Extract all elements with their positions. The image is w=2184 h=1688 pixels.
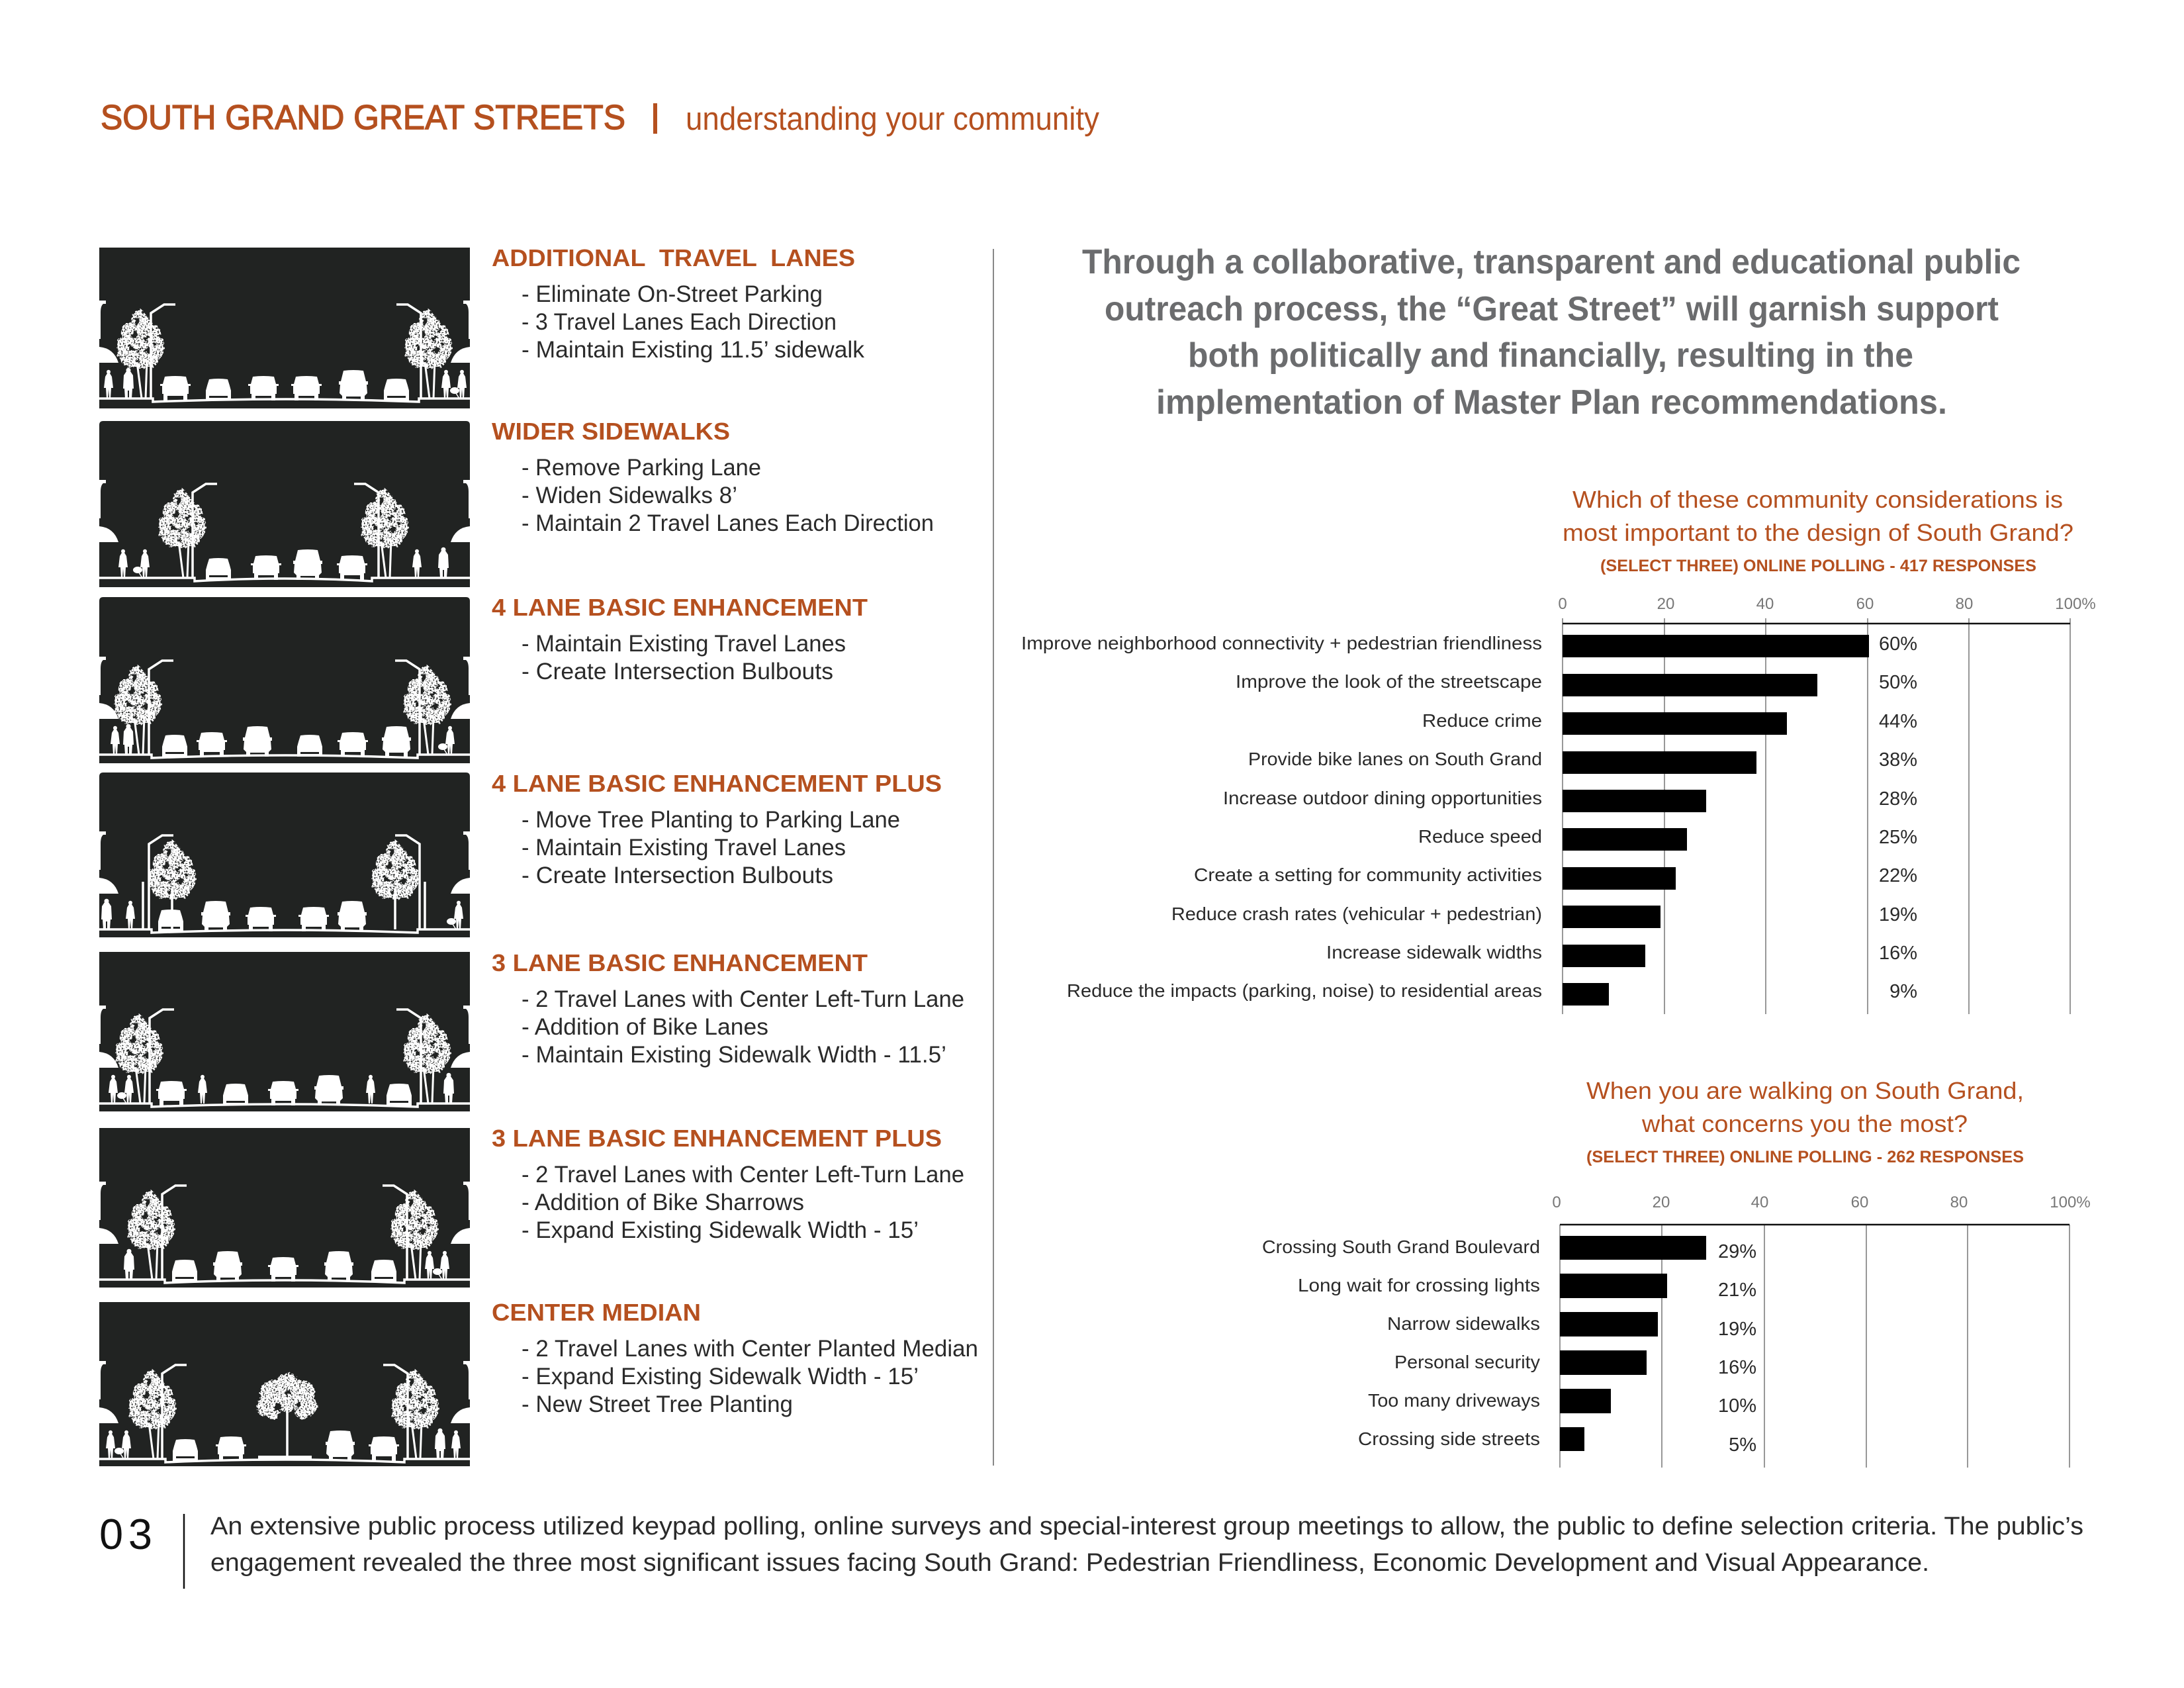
text block: 3 lane basic enhancement plus: 3 LANE BASIC ENHANCEMENT PLUS <box>492 1125 942 1152</box>
text block: 4 lane basic enhancement plus: 4 LANE BASIC ENHANCEMENT PLUS <box>492 770 942 797</box>
text block: 4 lane basic enhancement <box>492 594 868 684</box>
panel: center median section <box>99 1302 470 1466</box>
text block: 4 lane basic enhancement plus: - Create Intersection Bulbouts <box>522 863 833 888</box>
text block: 4 lane basic enhancement plus <box>492 770 942 888</box>
chart heading: walking concerns: what concerns you the most? <box>1641 1110 1968 1137</box>
row labels: Personal security <box>1394 1352 1540 1372</box>
trees and street lights <box>158 484 408 578</box>
text block: 4 lane basic enhancement: 4 LANE BASIC ENHANCEMENT <box>492 594 868 621</box>
cars <box>160 370 409 400</box>
footer text <box>210 1513 2083 1577</box>
row labels: Crossing side streets <box>1358 1429 1540 1449</box>
text block: additional travel lanes: - Maintain Existing 11.5’ sidewalk <box>522 337 864 363</box>
road and sidewalks <box>99 1103 470 1107</box>
chart heading: walking concerns: (SELECT THREE) ONLINE POLLING - 262 RESPONSES <box>1586 1148 2024 1166</box>
pedestrians <box>106 1429 461 1459</box>
chart heading: design considerations: most important to the design of South Grand? <box>1563 519 2073 546</box>
bar chart: walking concerns <box>1262 1194 2091 1468</box>
pedestrians <box>111 724 455 755</box>
footer text: An extensive public process utilized keypad polling, online surveys and special-interest group meetings to allow, the public to define selection criteria. The public’s <box>210 1513 2083 1540</box>
row labels: Improve neighborhood connectivity + pedestrian friendliness <box>1021 633 1542 653</box>
trees and street lights <box>143 835 425 929</box>
bars <box>1560 1236 1706 1451</box>
text block: 3 lane basic enhancement: 3 LANE BASIC ENHANCEMENT <box>492 949 868 976</box>
panel: additional travel lanes section <box>99 248 470 408</box>
row labels: Reduce the impacts (parking, noise) to residential areas <box>1067 980 1542 1001</box>
value labels: 22% <box>1879 865 1917 886</box>
text block: 3 lane basic enhancement: - Addition of Bike Lanes <box>522 1014 768 1040</box>
trees and street lights <box>116 305 452 399</box>
pedestrians <box>118 547 449 578</box>
bar chart: design considerations <box>1021 595 2096 1014</box>
panel: 3 lane basic enhancement section <box>99 952 470 1111</box>
cars <box>206 549 367 580</box>
row labels: Long wait for crossing lights <box>1298 1275 1540 1295</box>
text block: 3 lane basic enhancement plus: - Addition of Bike Sharrows <box>522 1190 804 1215</box>
value labels <box>1879 633 1917 1002</box>
axis tick labels: 20 <box>1653 1194 1670 1211</box>
value labels: 9% <box>1889 981 1917 1002</box>
value labels: 10% <box>1718 1395 1756 1417</box>
panel: 4 lane basic enhancement section <box>99 597 470 763</box>
trees and street lights <box>114 661 451 755</box>
axis tick labels: 0 <box>1558 595 1567 613</box>
bicyclists <box>198 1075 375 1103</box>
axis tick labels <box>1558 595 2096 613</box>
cars <box>173 1430 399 1461</box>
text block: wider sidewalks: - Maintain 2 Travel Lanes Each Direction <box>522 510 934 536</box>
text block: additional travel lanes: - 3 Travel Lanes Each Direction <box>522 309 837 335</box>
chart heading: walking concerns <box>1586 1077 2024 1166</box>
row labels: Too many driveways <box>1368 1390 1540 1411</box>
value labels: 50% <box>1879 672 1917 693</box>
row labels: Narrow sidewalks <box>1387 1313 1540 1334</box>
statement text: Through a collaborative, transparent and educational public <box>1082 243 2021 281</box>
chart heading: design considerations <box>1563 486 2073 575</box>
row labels: Reduce crime <box>1422 710 1542 731</box>
text block: center median: - Expand Existing Sidewalk Width - 15’ <box>522 1364 919 1389</box>
trees and street lights <box>115 1009 451 1103</box>
axis tick labels: 40 <box>1751 1194 1768 1211</box>
text block: 3 lane basic enhancement: - 2 Travel Lanes with Center Left-Turn Lane <box>522 986 964 1012</box>
text block: center median: CENTER MEDIAN <box>492 1299 701 1326</box>
row labels: Increase sidewalk widths <box>1326 942 1542 962</box>
statement text: implementation of Master Plan recommendations. <box>1156 383 1947 422</box>
row labels <box>1262 1237 1540 1449</box>
road and sidewalks <box>99 578 470 581</box>
statement text: both politically and financially, resulting in the <box>1188 336 1913 375</box>
axis tick labels <box>1552 1194 2091 1211</box>
row labels: Crossing South Grand Boulevard <box>1262 1237 1540 1257</box>
axis tick labels: 60 <box>1856 595 1874 613</box>
statement text <box>1082 243 2021 422</box>
axis tick labels: 100% <box>2055 595 2096 613</box>
row labels: Reduce crash rates (vehicular + pedestrian) <box>1171 904 1542 924</box>
page number: 03 <box>99 1510 152 1558</box>
cars <box>172 1251 396 1282</box>
title <box>101 99 1099 137</box>
row labels: Create a setting for community activities <box>1194 865 1542 885</box>
value labels <box>1718 1241 1756 1456</box>
text block: 4 lane basic enhancement: - Maintain Existing Travel Lanes <box>522 631 846 657</box>
row labels: Provide bike lanes on South Grand <box>1248 749 1542 769</box>
statement text: outreach process, the “Great Street” will garnish support <box>1105 290 1999 328</box>
row labels <box>1021 633 1542 1001</box>
text block: 3 lane basic enhancement: - Maintain Existing Sidewalk Width - 11.5’ <box>522 1042 946 1068</box>
trees and street lights <box>127 1186 438 1280</box>
chart heading: design considerations: Which of these community considerations is <box>1572 486 2063 513</box>
text block: additional travel lanes: - Eliminate On-Street Parking <box>522 281 823 307</box>
planted median <box>258 1456 312 1460</box>
text block: 3 lane basic enhancement plus: - Expand Existing Sidewalk Width - 15’ <box>522 1217 919 1243</box>
value labels: 21% <box>1718 1280 1756 1301</box>
title: SOUTH GRAND GREAT STREETS <box>101 99 625 137</box>
text block: 3 lane basic enhancement <box>492 949 964 1068</box>
text block: 4 lane basic enhancement plus: - Move Tree Planting to Parking Lane <box>522 807 900 833</box>
text block: 4 lane basic enhancement: - Create Intersection Bulbouts <box>522 659 833 684</box>
panel: wider sidewalks section <box>99 421 470 587</box>
trees and street lights <box>128 1365 439 1459</box>
value labels: 19% <box>1879 904 1917 925</box>
text block: center median: - New Street Tree Planting <box>522 1391 793 1417</box>
text block: wider sidewalks: WIDER SIDEWALKS <box>492 418 730 445</box>
text block: wider sidewalks: - Remove Parking Lane <box>522 455 761 481</box>
value labels: 19% <box>1718 1319 1756 1340</box>
footer text: engagement revealed the three most significant issues facing South Grand: Pedestrian Friendliness, Economic Development and Visual Appearance. <box>210 1549 1929 1577</box>
axis tick labels: 80 <box>1956 595 1973 613</box>
text block: center median <box>492 1299 978 1417</box>
title: understanding your community <box>686 101 1099 137</box>
pedestrians <box>109 1073 454 1103</box>
text block: 3 lane basic enhancement plus: - 2 Travel Lanes with Center Left-Turn Lane <box>522 1162 964 1188</box>
value labels: 16% <box>1718 1357 1756 1378</box>
value labels: 25% <box>1879 827 1917 848</box>
bars <box>1563 635 1869 1006</box>
value labels: 60% <box>1879 633 1917 655</box>
axis tick labels: 40 <box>1756 595 1774 613</box>
axis tick labels: 100% <box>2050 1194 2091 1211</box>
pedestrians <box>104 368 467 399</box>
text block: additional travel lanes: ADDITIONAL TRAVEL LANES <box>492 244 855 271</box>
road and sidewalks <box>99 1459 470 1462</box>
text block: 3 lane basic enhancement plus <box>492 1125 964 1243</box>
axis tick labels: 80 <box>1950 1194 1968 1211</box>
row labels: Increase outdoor dining opportunities <box>1223 788 1542 808</box>
text block: 4 lane basic enhancement plus: - Maintain Existing Travel Lanes <box>522 835 846 861</box>
road and sidewalks <box>99 755 470 758</box>
text block: wider sidewalks: - Widen Sidewalks 8’ <box>522 483 737 508</box>
pedestrians <box>101 899 463 929</box>
value labels: 28% <box>1879 788 1917 810</box>
value labels: 38% <box>1879 749 1917 771</box>
pedestrians <box>124 1249 449 1280</box>
road and sidewalks <box>99 1280 470 1283</box>
text block: additional travel lanes <box>492 244 864 363</box>
value labels: 16% <box>1879 943 1917 964</box>
panel: 4 lane basic enhancement plus section <box>99 773 470 937</box>
panel: 3 lane basic enhancement plus section <box>99 1128 470 1288</box>
median tree <box>257 1374 318 1456</box>
value labels: 5% <box>1729 1434 1756 1456</box>
value labels: 44% <box>1879 711 1917 732</box>
cars <box>158 901 367 931</box>
value labels: 29% <box>1718 1241 1756 1262</box>
axis tick labels: 60 <box>1851 1194 1868 1211</box>
chart heading: design considerations: (SELECT THREE) ONLINE POLLING - 417 RESPONSES <box>1600 557 2036 575</box>
cars <box>156 1075 412 1105</box>
road and sidewalks <box>99 929 470 933</box>
row labels: Reduce speed <box>1418 826 1542 847</box>
cars <box>162 726 411 757</box>
axis tick labels: 0 <box>1552 1194 1561 1211</box>
road and sidewalks <box>99 399 470 402</box>
chart heading: walking concerns: When you are walking on South Grand, <box>1586 1077 2024 1104</box>
axis tick labels: 20 <box>1657 595 1674 613</box>
text block: center median: - 2 Travel Lanes with Center Planted Median <box>522 1336 978 1362</box>
row labels: Improve the look of the streetscape <box>1236 671 1542 692</box>
text block: wider sidewalks <box>492 418 934 536</box>
